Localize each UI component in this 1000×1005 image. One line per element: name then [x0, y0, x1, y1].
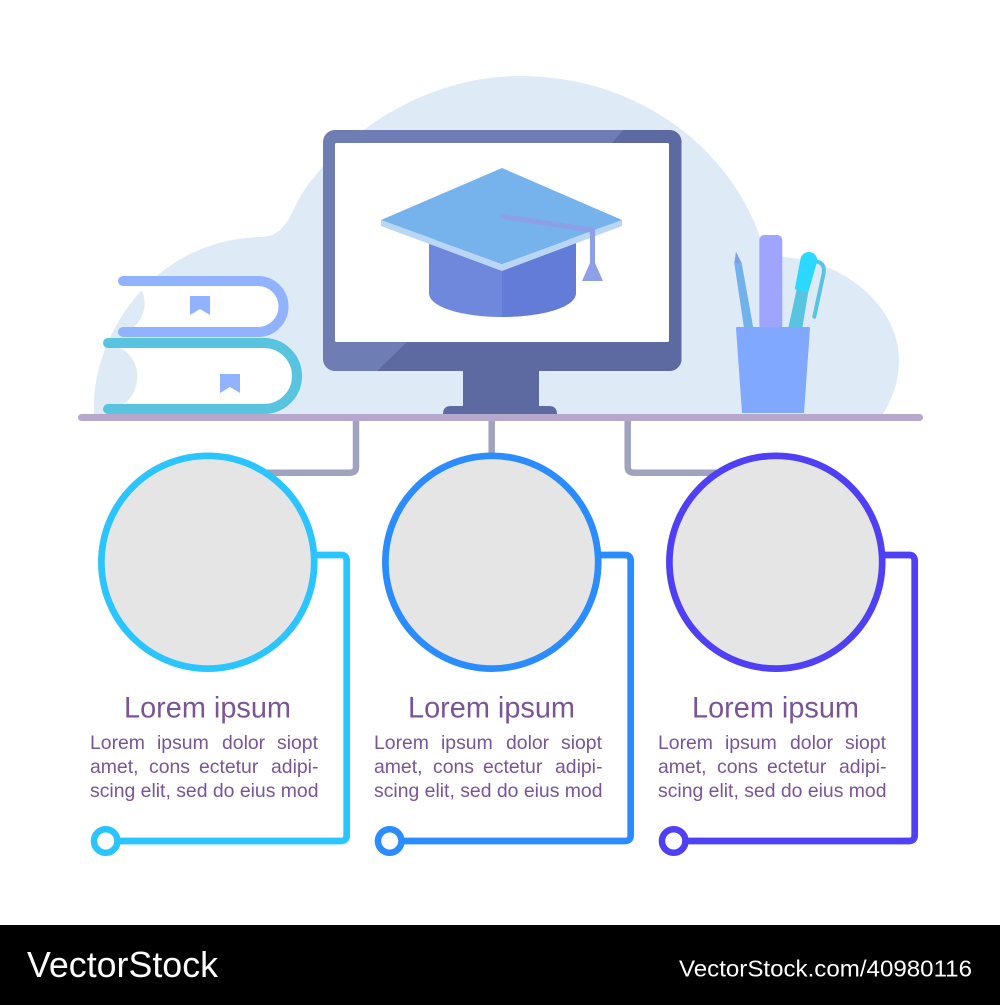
top book cover [123, 281, 284, 332]
step three body text: ipsum [725, 732, 777, 754]
tassel [500, 214, 603, 281]
step two body text: ipsum [441, 732, 493, 754]
pen body [788, 289, 808, 328]
bottom book cover [108, 343, 297, 409]
step one body text: Lorem [90, 732, 145, 754]
bottom book pages [120, 348, 292, 404]
step two body text: adipi- [555, 756, 602, 778]
step one outline [117, 555, 347, 841]
ruler [759, 235, 782, 330]
top book pages [133, 286, 279, 328]
step one body text: siopt [277, 732, 319, 754]
step two body text: Lorem [374, 732, 429, 754]
background blob [94, 76, 899, 414]
step two body text: dolor [506, 732, 550, 754]
footer logo text: VectorStock [27, 944, 219, 985]
footer image id: VectorStock.com/40980116 [679, 956, 972, 982]
step one body text: amet, [90, 756, 138, 778]
monitor screen [335, 143, 669, 342]
step one circle [101, 456, 314, 669]
icon: computer monitor [323, 130, 682, 414]
step two body text: siopt [561, 732, 603, 754]
step three node [662, 829, 685, 853]
shelf [78, 414, 923, 421]
step one body text: ipsum [157, 732, 209, 754]
icon: graduation cap [381, 168, 622, 317]
step three circle [669, 456, 882, 669]
icon: pencil cup [734, 235, 824, 413]
pen clip [814, 262, 824, 317]
panel: step three [658, 456, 915, 853]
step one body text: scing elit, sed do eius mod [90, 780, 319, 802]
panel: step two [374, 456, 631, 853]
step three body text: adipi- [839, 756, 886, 778]
bottom bookmark [220, 374, 240, 393]
cap board top [381, 168, 622, 264]
monitor frame [323, 130, 682, 371]
footer bar [0, 925, 1000, 1005]
step three body text: amet, [658, 756, 706, 778]
step three heading: Lorem ipsum [692, 691, 859, 724]
step three body text: siopt [845, 732, 887, 754]
pencil tip [734, 252, 742, 263]
step three body text: Lorem [658, 732, 713, 754]
connector lines [265, 420, 725, 473]
step three outline [685, 555, 915, 841]
step two node [378, 829, 401, 853]
cap body right [502, 240, 576, 317]
step two outline [401, 555, 631, 841]
pencil body [734, 263, 753, 328]
cap body left [429, 240, 502, 317]
panel: step one [90, 456, 347, 853]
cap board edge [381, 220, 622, 271]
step three body text: scing elit, sed do eius mod [658, 780, 887, 802]
step two body text: scing elit, sed do eius mod [374, 780, 603, 802]
pen cap [795, 252, 817, 292]
step three body text: cons [717, 756, 758, 778]
step one node [94, 829, 117, 853]
monitor frame shade [377, 130, 682, 371]
step two body text: amet, [374, 756, 422, 778]
step one body text: cons [149, 756, 190, 778]
step one heading: Lorem ipsum [124, 691, 291, 724]
step two body text: ectetur [483, 756, 543, 778]
step three body text: dolor [790, 732, 834, 754]
step two body text: cons [433, 756, 474, 778]
step one body text: ectetur [199, 756, 259, 778]
step three body text: ectetur [767, 756, 827, 778]
step two circle [385, 456, 598, 669]
step one body text: dolor [222, 732, 266, 754]
icon: stack of books [108, 281, 297, 409]
monitor stand [443, 370, 557, 414]
step two heading: Lorem ipsum [408, 691, 575, 724]
top bookmark [190, 296, 210, 315]
step one body text: adipi- [271, 756, 318, 778]
cup [736, 327, 810, 413]
